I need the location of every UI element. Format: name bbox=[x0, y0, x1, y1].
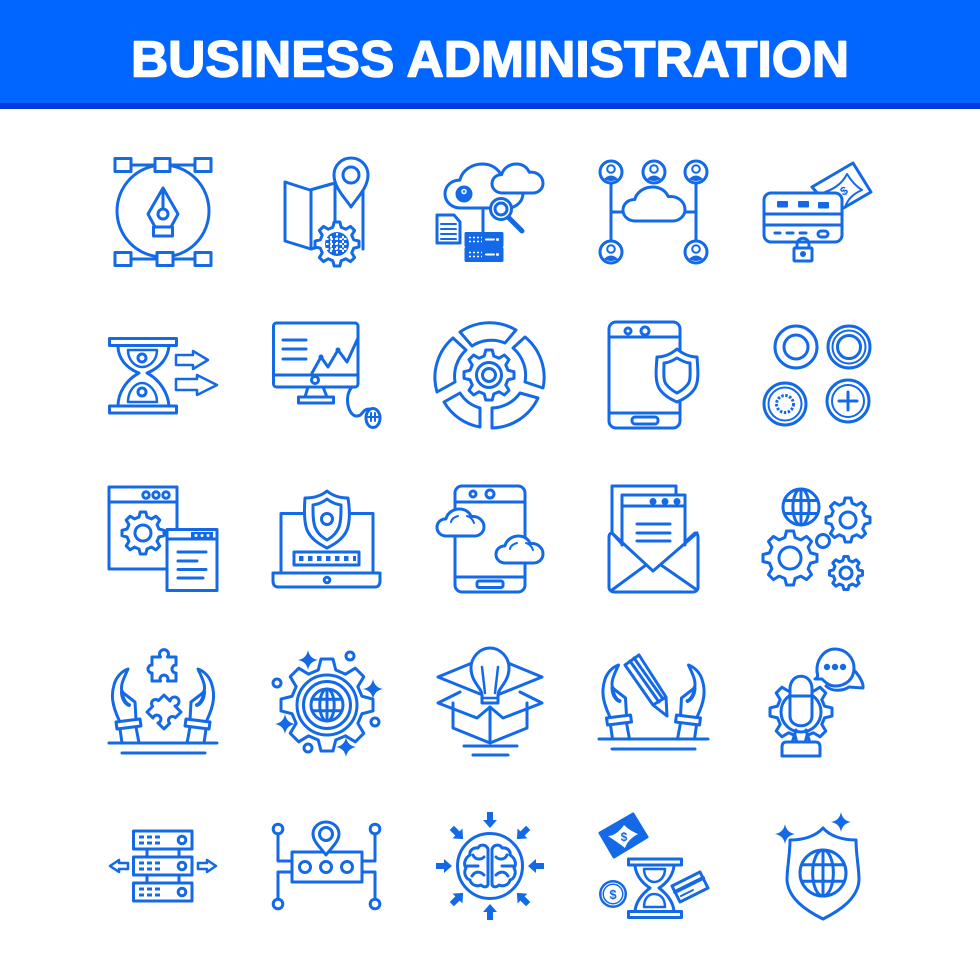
icon: money, coin, card and hourglass: $ bbox=[621, 830, 628, 844]
icon: four round buttons bbox=[764, 326, 870, 425]
icon: microphone gear with chat bubbles bbox=[770, 649, 863, 756]
icon: phone with shield bbox=[609, 322, 698, 428]
icon: hands with puzzle pieces bbox=[109, 650, 217, 753]
icon: cloud storage search bbox=[437, 164, 543, 260]
icon: location network bbox=[273, 822, 380, 909]
icon: gear in segmented ring bbox=[435, 323, 544, 428]
icon: light bulb in open box bbox=[438, 648, 542, 755]
icon: shield with globe and sparkles bbox=[775, 812, 859, 919]
icon: hands with pencil bbox=[599, 655, 708, 749]
icon: money, coin, card and hourglass: $ bbox=[609, 887, 617, 902]
icon: map with pin and gear bbox=[285, 158, 368, 266]
icon: pen tool bbox=[115, 158, 211, 266]
icon: laptop with shield and password bbox=[273, 491, 380, 587]
icon: brain with inward arrows bbox=[436, 812, 544, 920]
header banner bbox=[0, 0, 980, 109]
icon: settings and document windows bbox=[109, 487, 217, 590]
title: BUSINESS ADMINISTRATION bbox=[131, 30, 849, 88]
icon: globe gear with sparkles bbox=[273, 650, 383, 757]
icon: money, coin, card and hourglass bbox=[599, 814, 708, 918]
icon: envelope with letter bbox=[609, 486, 698, 592]
icon: hourglass with arrows bbox=[110, 338, 217, 413]
icon: globe and gears bbox=[763, 489, 870, 590]
icon: credit card with cash and lock: $ bbox=[838, 183, 851, 199]
icon: phone with clouds bbox=[437, 486, 543, 592]
icon: server rack with arrows bbox=[110, 831, 216, 901]
icon: monitor with chart and mouse bbox=[274, 323, 380, 428]
icon: users connected to cloud bbox=[600, 161, 707, 263]
icon: credit card with cash and lock bbox=[764, 163, 871, 261]
